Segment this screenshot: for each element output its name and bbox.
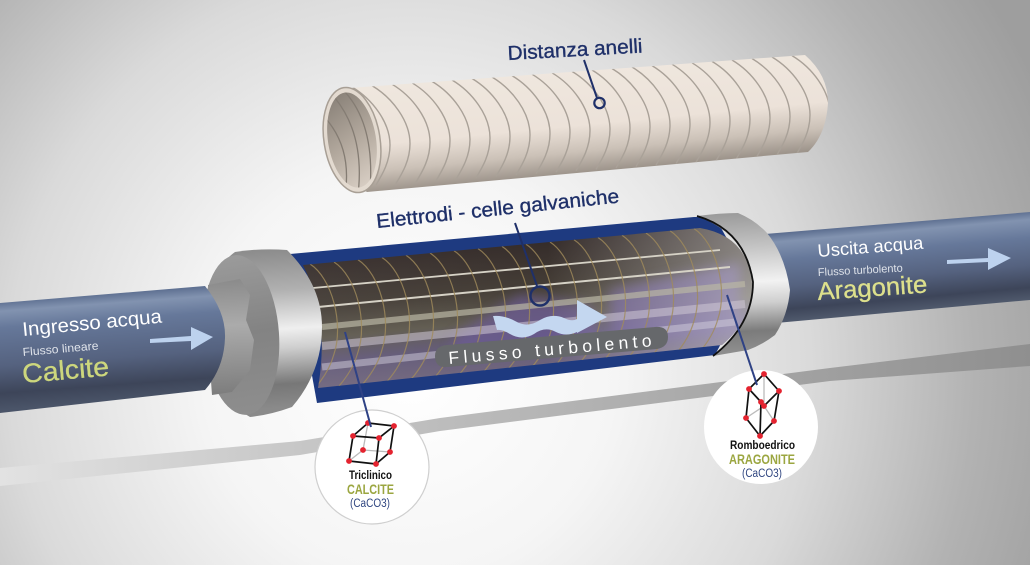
- callout line: aragonite: [727, 295, 757, 385]
- outlet arrow: [947, 248, 1011, 270]
- electrode rings: [310, 229, 722, 388]
- inlet labels: Calcite: [21, 352, 110, 389]
- badge: Romboedrico aragonite: ARAGONITE: [729, 452, 795, 467]
- inlet labels: Ingresso acqua: [21, 306, 163, 341]
- badge: Triclinico calcite: CALCITE: [347, 482, 394, 497]
- glass with electrodes: [303, 228, 752, 388]
- blue casing: [290, 217, 752, 403]
- outlet labels: Flusso turbolento: [818, 263, 903, 279]
- wave arrow: [493, 300, 607, 338]
- inlet pipe: [0, 286, 225, 413]
- inlet labels: Flusso lineare: [22, 340, 99, 359]
- badge: Romboedrico aragonite: [704, 370, 818, 484]
- inlet arrow: [150, 327, 213, 350]
- ring tube: [316, 55, 830, 197]
- badge: Romboedrico aragonite: Romboedrico: [730, 438, 795, 452]
- collar body: [203, 249, 322, 417]
- label: Distanza anelli: Distanza anelli: [507, 35, 643, 65]
- inner spiral: [327, 92, 371, 195]
- callout line: calcite: [345, 332, 371, 427]
- purple mineral patches: [450, 258, 744, 344]
- crystal: rhombohedral lattice: [743, 371, 782, 439]
- outlet pipe: [765, 212, 1030, 324]
- badge: Romboedrico aragonite: (CaCO3): [742, 468, 782, 480]
- outlet labels: [816, 233, 928, 306]
- glass end line: [697, 216, 753, 356]
- tube rim: [316, 83, 388, 197]
- callout: Distanza anelli pointer: [584, 60, 605, 108]
- crystal: cubic lattice: [346, 420, 397, 467]
- collar face: [198, 253, 284, 417]
- outlet labels: Aragonite: [816, 270, 928, 306]
- left collar: [0, 249, 322, 417]
- inlet labels: [21, 306, 163, 389]
- label: Elettrodi - celle galvaniche: Elettrodi - celle galvaniche: [375, 186, 620, 233]
- tube opening: [321, 89, 383, 191]
- rods: [313, 250, 745, 367]
- floor shadow band: [0, 344, 1030, 486]
- tube spiral rings: [352, 56, 830, 185]
- hex nut: [208, 279, 254, 395]
- badge: Triclinico calcite: (CaCO3): [350, 498, 390, 510]
- callout: Elettrodi pointer: [515, 223, 550, 306]
- outlet labels: Uscita acqua: [817, 233, 925, 261]
- pill: Flusso turbolento: Flusso turbolento: [448, 330, 656, 368]
- badge: Triclinico calcite: Triclinico: [349, 470, 392, 482]
- tube body: [324, 55, 828, 192]
- right collar: [697, 213, 790, 356]
- badge: Triclinico calcite: [315, 410, 429, 524]
